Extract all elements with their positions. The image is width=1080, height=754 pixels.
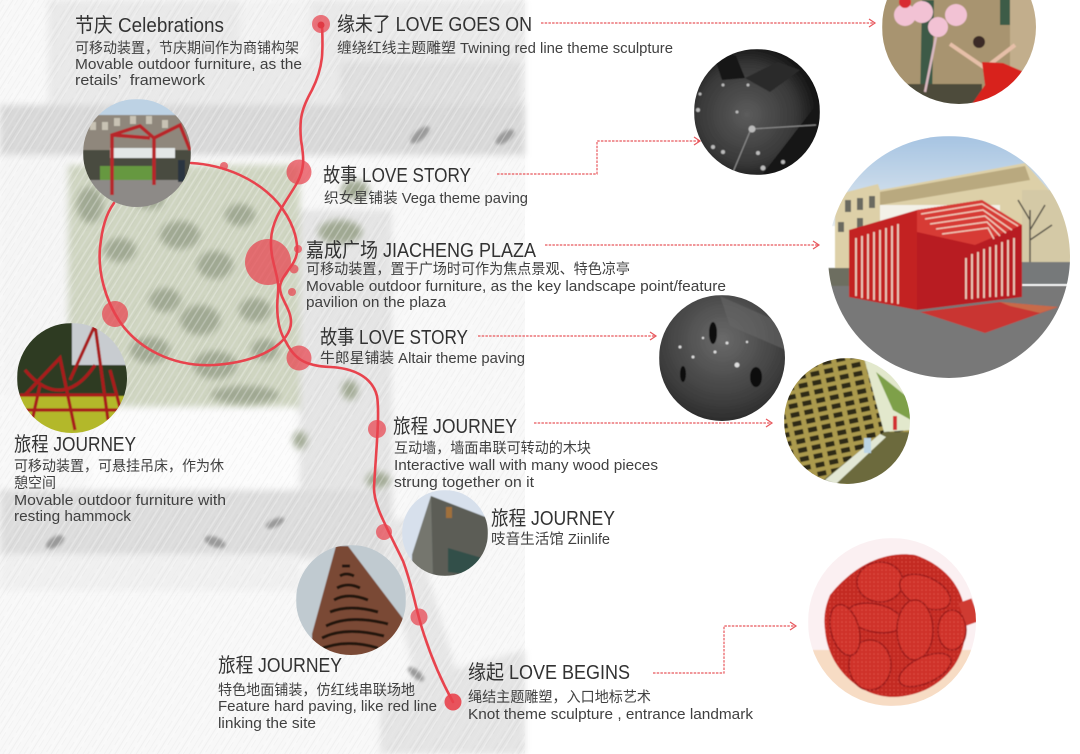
text block: Journey hammock: resting hammock <box>14 509 132 525</box>
photo: interactive wood wall <box>784 358 911 485</box>
heading: Celebrations: 节庆 Celebrations <box>75 14 224 37</box>
text block: Journey wall: strung together on it <box>394 475 534 491</box>
heading: Love Goes On: 缘未了 LOVE GOES ON <box>337 13 532 36</box>
text block: Celebrations: retails’ framework <box>75 73 206 89</box>
text block: Celebrations <box>75 14 302 89</box>
photo: red pavilion on plaza <box>828 136 1071 381</box>
route nodes <box>102 15 462 710</box>
text block: Journey hammock: 憩空间 <box>14 475 56 492</box>
text block: Journey Ziinlife <box>491 507 615 548</box>
text block: Journey paving <box>218 654 437 732</box>
text block: Love Begins: Knot theme sculpture , entrance landmark <box>468 707 754 723</box>
text block: Journey paving: Feature hard paving, like red line <box>218 699 437 715</box>
arrow: love story to Altair photo <box>478 332 656 340</box>
text block: Love Begins <box>468 661 754 723</box>
plaza loop line <box>100 163 297 365</box>
heading: Jiacheng Plaza: 嘉成广场 JIACHENG PLAZA <box>306 239 537 262</box>
heading: Journey: 旅程 JOURNEY <box>491 507 615 530</box>
arrow: Jiacheng Plaza to pavilion photo <box>545 241 819 249</box>
text block: Jiacheng Plaza: 可移动装置，置于广场时可作为焦点景观、特色凉亭 <box>306 260 630 278</box>
heading: Journey: 旅程 JOURNEY <box>14 433 136 456</box>
text block: Journey hammock: Movable outdoor furniture with <box>14 493 226 509</box>
text block: Jiacheng Plaza: pavilion on the plaza <box>306 295 447 311</box>
text block: Love Begins: 绳结主题雕塑，入口地标艺术 <box>468 689 651 706</box>
text block: Jiacheng Plaza: Movable outdoor furniture, as the key landscape point/feature <box>306 279 726 295</box>
arrow: love goes on to balloons photo <box>541 19 875 27</box>
photo: Altair theme paving <box>659 295 786 422</box>
heading: Love Begins: 缘起 LOVE BEGINS <box>468 661 630 684</box>
photo: woman with balloons <box>882 0 1040 106</box>
heading: Love Story: 故事 LOVE STORY <box>320 326 468 349</box>
photo: celebrations market frame <box>83 99 191 210</box>
text block: Love Goes On <box>337 13 673 57</box>
text block: Journey hammock <box>14 433 226 525</box>
heading: Journey: 旅程 JOURNEY <box>218 654 342 677</box>
text block: Jiacheng Plaza <box>306 239 726 311</box>
text block: Journey Ziinlife: 吱音生活馆 Ziinlife <box>491 531 610 548</box>
text block: Journey paving: linking the site <box>218 716 316 732</box>
text block: Love Story Vega: 织女星铺装 Vega theme paving <box>324 189 528 207</box>
text block: Journey wall <box>393 415 658 491</box>
text block: Celebrations: 可移动装置，节庆期间作为商铺构架 <box>75 40 299 57</box>
photo: red knot sculpture <box>808 538 980 708</box>
text block: Celebrations: Movable outdoor furniture, as the <box>75 57 302 73</box>
text block: Journey hammock: 可移动装置，可悬挂吊床，作为休 <box>14 458 224 475</box>
photo: feature hard paving <box>296 545 406 660</box>
photo: Vega theme paving <box>694 49 820 175</box>
text block: Love Story Altair: 牛郎星铺装 Altair theme paving <box>320 350 525 367</box>
background site plan map <box>0 0 525 754</box>
main red route line <box>271 24 453 702</box>
text block: Love Story Altair <box>320 326 525 367</box>
arrow: journey to wood wall photo <box>534 419 772 427</box>
red line route <box>100 24 453 702</box>
photo: Ziinlife building <box>402 490 488 576</box>
photo: hammock frame on lawn <box>17 323 128 436</box>
text block: Love Story Vega <box>323 164 528 207</box>
text block: Journey paving: 特色地面铺装，仿红线串联场地 <box>218 682 415 699</box>
text block: Journey wall: Interactive wall with many wood pieces <box>394 458 658 474</box>
text block: Journey wall: 互动墙，墙面串联可转动的木块 <box>394 440 591 457</box>
heading: Journey: 旅程 JOURNEY <box>393 415 517 438</box>
text block: Love Goes On: 缠绕红线主题雕塑 Twining red line theme sculpture <box>337 39 673 57</box>
heading: Love Story: 故事 LOVE STORY <box>323 164 471 187</box>
arrow: love begins to knot photo <box>653 622 796 673</box>
arrow: love story to Vega photo <box>497 137 700 174</box>
